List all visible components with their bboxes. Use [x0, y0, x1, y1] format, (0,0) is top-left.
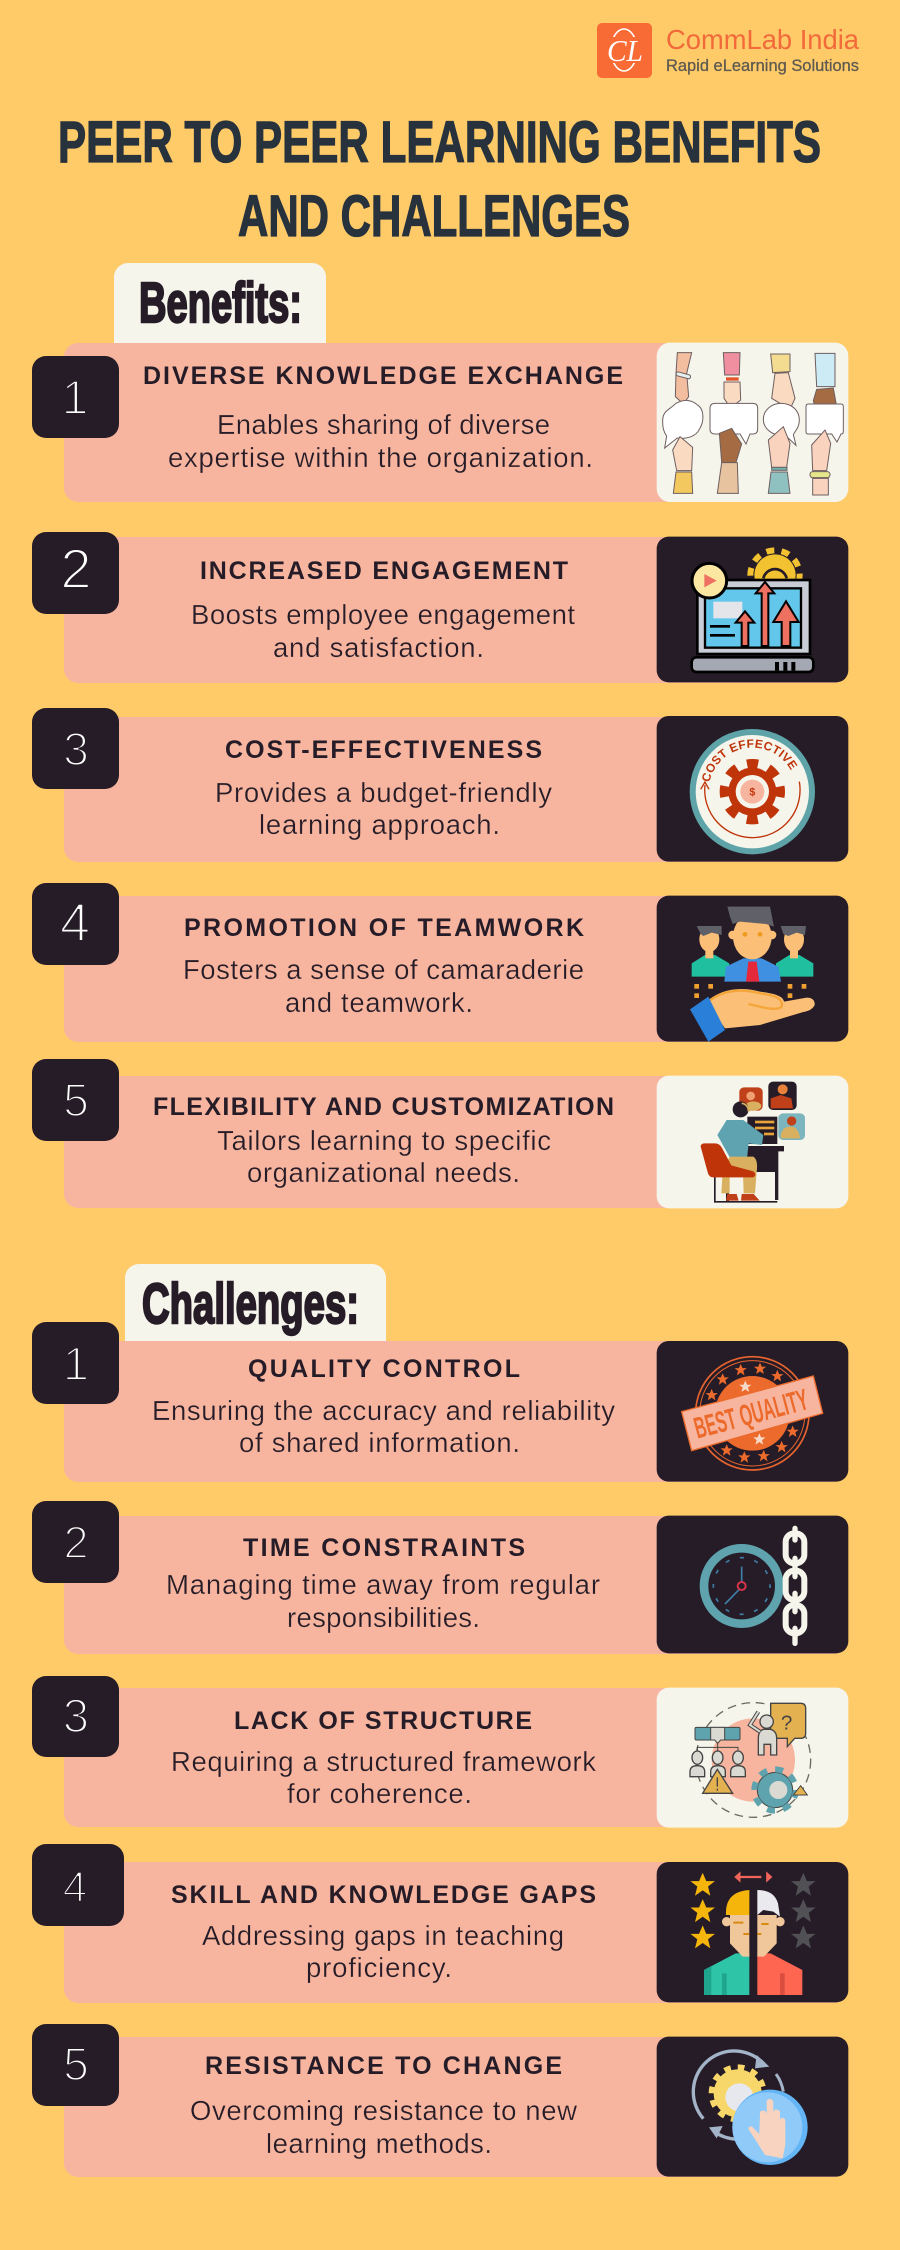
panel: challenge 2: 2: [63, 1517, 89, 1568]
title: [58, 110, 821, 249]
panel: benefit 4: Fosters a sense of camaraderie: [183, 954, 584, 985]
heading: Benefits tab: [114, 263, 326, 363]
panel: benefit 3: Provides a budget-friendly: [215, 777, 552, 808]
icon: lack of structure diagram: ?: [781, 1711, 792, 1734]
panel: benefit 5: [32, 1059, 848, 1208]
panel: benefit 3: COST-EFFECTIVENESS: [225, 736, 542, 764]
icon: clock and chain: [657, 1516, 848, 1653]
panel: benefit 3: learning approach.: [259, 809, 500, 840]
logo: CommLab India: [597, 23, 859, 78]
panel: challenge 4: SKILL AND KNOWLEDGE GAPS: [171, 1881, 596, 1909]
panel: challenge 3: for coherence.: [287, 1778, 472, 1809]
logo: CommLab India: CommLab India: [666, 24, 859, 55]
panel: challenge 3: [32, 1676, 848, 1827]
panel: challenge 5: Overcoming resistance to new: [190, 2095, 577, 2126]
panel: challenge 1: 1: [63, 1337, 89, 1390]
panel: challenge 5: learning methods.: [266, 2128, 492, 2159]
panel: challenge 4: 4: [63, 1863, 87, 1912]
panel: challenge 4: Addressing gaps in teaching: [202, 1920, 564, 1951]
logo: CommLab India: Rapid eLearning Solutions: [666, 56, 859, 75]
icon: cost effective badge: [656, 716, 848, 862]
icon: cost effective badge: COST EFFECTIVE: [702, 739, 798, 782]
icon: skill gap split portrait: [657, 1862, 848, 2002]
panel: benefit 5: organizational needs.: [247, 1157, 520, 1188]
panel: benefit 1: expertise within the organization.: [168, 442, 593, 473]
panel: benefit 3: [32, 708, 848, 862]
panel: benefit 1: DIVERSE KNOWLEDGE EXCHANGE: [143, 362, 623, 390]
panel: challenge 1: Ensuring the accuracy and reliability: [152, 1395, 615, 1426]
icon: laptop with growth arrows: [657, 537, 848, 682]
panel: benefit 5: 5: [63, 1074, 89, 1126]
panel: benefit 2: INCREASED ENGAGEMENT: [200, 557, 568, 585]
heading: Benefits tab: Benefits:: [139, 271, 302, 335]
panel: benefit 2: 2: [60, 537, 92, 600]
panel: benefit 2: [32, 532, 848, 683]
icon: best quality stamp: [657, 1341, 848, 1482]
panel: benefit 3: 3: [63, 723, 89, 775]
panel: challenge 2: [32, 1501, 848, 1654]
icon: lack of structure diagram: [657, 1688, 848, 1828]
panel: challenge 5: 5: [63, 2038, 89, 2090]
panel: challenge 1: QUALITY CONTROL: [248, 1355, 520, 1383]
panel: challenge 4: [32, 1844, 848, 2003]
panel: benefit 4: [32, 883, 848, 1042]
panel: challenge 5: RESISTANCE TO CHANGE: [205, 2052, 562, 2080]
panel: challenge 3: 3: [63, 1689, 89, 1742]
heading: Challenges tab: [125, 1264, 386, 1364]
panel: benefit 4: PROMOTION OF TEAMWORK: [184, 914, 584, 942]
panel: benefit 4: and teamwork.: [285, 987, 473, 1018]
panel: benefit 1: Enables sharing of diverse: [217, 409, 550, 440]
logo: CommLab India: CL: [607, 33, 643, 68]
panel: benefit 1: [32, 343, 848, 502]
icon: team on an open hand: [657, 896, 848, 1042]
panel: benefit 5: FLEXIBILITY AND CUSTOMIZATION: [153, 1093, 614, 1121]
panel: challenge 2: Managing time away from regular: [166, 1569, 600, 1600]
panel: challenge 3: Requiring a structured framework: [171, 1746, 596, 1777]
panel: challenge 5: [32, 2024, 848, 2177]
panel: challenge 4: proficiency.: [306, 1952, 452, 1983]
panel: benefit 2: and satisfaction.: [273, 632, 484, 663]
icon: resistance to change hand: [657, 2037, 848, 2177]
panel: benefit 5: Tailors learning to specific: [217, 1125, 551, 1156]
panel: challenge 2: TIME CONSTRAINTS: [243, 1534, 525, 1562]
panel: challenge 1: of shared information.: [239, 1427, 520, 1458]
panel: challenge 2: responsibilities.: [287, 1602, 480, 1633]
panel: benefit 2: Boosts employee engagement: [191, 599, 575, 630]
panel: benefit 4: 4: [60, 893, 90, 953]
icon: person on video calls at desk: [657, 1076, 848, 1208]
icon: cost effective badge: $: [749, 787, 755, 799]
panel: challenge 1: [32, 1322, 848, 1482]
heading: Challenges tab: Challenges:: [142, 1272, 359, 1336]
panel: challenge 3: LACK OF STRUCTURE: [234, 1707, 532, 1735]
panel: benefit 1: 1: [62, 372, 88, 425]
icon: hands holding speech bubbles: [657, 343, 848, 502]
title: AND CHALLENGES: [238, 184, 630, 249]
